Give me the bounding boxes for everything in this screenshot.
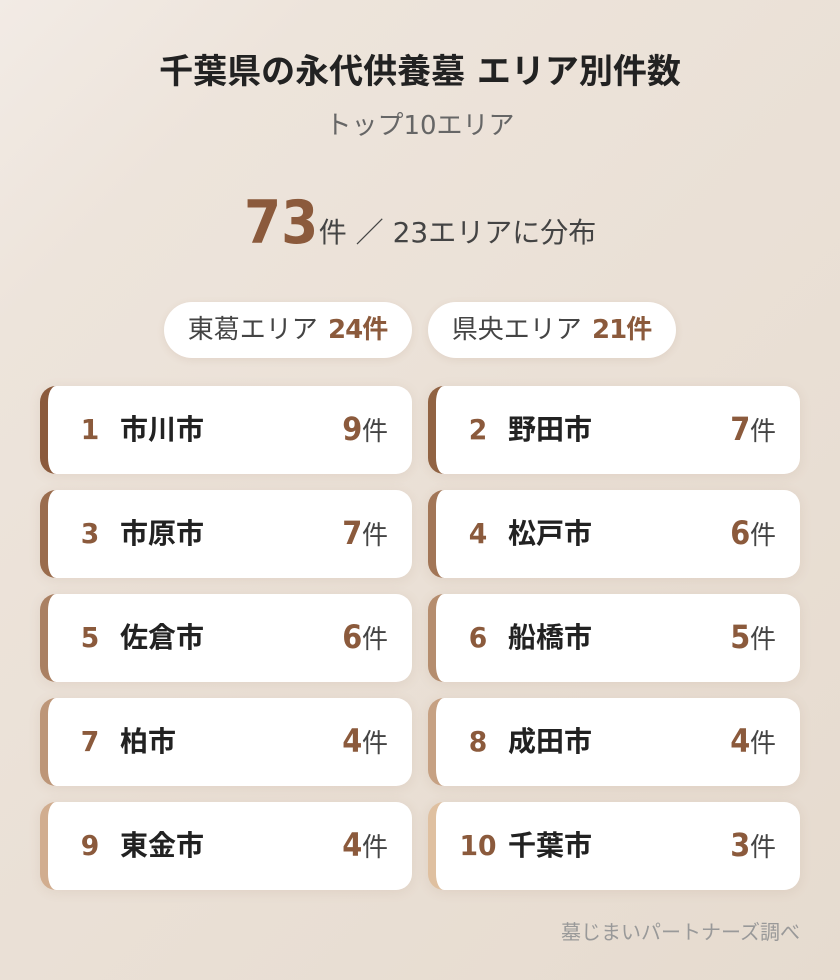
card: rank 4: 松戸市	[508, 517, 592, 550]
card: rank 1: 件	[362, 417, 388, 447]
card: rank 5: 5	[81, 621, 99, 654]
card: rank 2: 7	[730, 410, 750, 448]
card: rank 2: 2	[469, 413, 487, 446]
card: rank 3: 件	[362, 521, 388, 551]
card: rank 8: 成田市	[508, 725, 592, 758]
card: rank 6	[428, 594, 800, 682]
card: rank 9: 件	[362, 833, 388, 863]
card: rank 4	[428, 490, 800, 578]
pill: Kenou area	[428, 302, 676, 358]
card: rank 5: 佐倉市	[120, 621, 204, 654]
card: rank 10: 件	[750, 833, 776, 863]
card: rank 7: 件	[362, 729, 388, 759]
card: rank 9: 4	[342, 826, 362, 864]
card: rank 10	[428, 802, 800, 890]
card: rank 4: 6	[730, 514, 750, 552]
card: rank 10: 3	[730, 826, 750, 864]
card: rank 10: 千葉市	[508, 829, 592, 862]
card: rank 9	[40, 802, 412, 890]
card: rank 1: 1	[81, 413, 99, 446]
card: rank 5: 6	[342, 618, 362, 656]
title: 千葉県の永代供養墓 エリア別件数	[159, 52, 681, 92]
card: rank 4: 4	[469, 517, 487, 550]
card: rank 8: 件	[750, 729, 776, 759]
card: rank 6: 船橋市	[508, 621, 592, 654]
total summary: 件 ／ 23エリアに分布	[319, 216, 596, 249]
card: rank 3: 7	[342, 514, 362, 552]
pill: Tokatsu area: 東葛エリア 24件	[188, 315, 388, 345]
card: rank 7: 柏市	[120, 725, 176, 758]
total summary: 73	[244, 188, 318, 258]
card: rank 4: 件	[750, 521, 776, 551]
card: rank 3: 3	[81, 517, 99, 550]
card: rank 1	[40, 386, 412, 474]
card: rank 9: 東金市	[120, 829, 204, 862]
source note: 墓じまいパートナーズ調べ	[561, 920, 800, 944]
total summary	[244, 188, 596, 258]
pill: Tokatsu area	[164, 302, 412, 358]
card: rank 9: 9	[81, 829, 99, 862]
card: rank 6: 5	[730, 618, 750, 656]
card: rank 8: 8	[469, 725, 487, 758]
card: rank 3: 市原市	[120, 517, 204, 550]
card: rank 7: 4	[342, 722, 362, 760]
card: rank 6: 6	[469, 621, 487, 654]
subtitle: トップ10エリア	[325, 111, 515, 141]
pill: Kenou area: 県央エリア 21件	[452, 315, 652, 345]
card: rank 1: 9	[342, 410, 362, 448]
card: rank 2	[428, 386, 800, 474]
card: rank 7: 7	[81, 725, 99, 758]
card: rank 2: 件	[750, 417, 776, 447]
card: rank 1: 市川市	[120, 413, 204, 446]
card: rank 2: 野田市	[508, 413, 592, 446]
card: rank 8	[428, 698, 800, 786]
card: rank 10: 10	[459, 829, 497, 862]
card: rank 8: 4	[730, 722, 750, 760]
card: rank 6: 件	[750, 625, 776, 655]
card: rank 3	[40, 490, 412, 578]
card: rank 5	[40, 594, 412, 682]
card: rank 5: 件	[362, 625, 388, 655]
card: rank 7	[40, 698, 412, 786]
